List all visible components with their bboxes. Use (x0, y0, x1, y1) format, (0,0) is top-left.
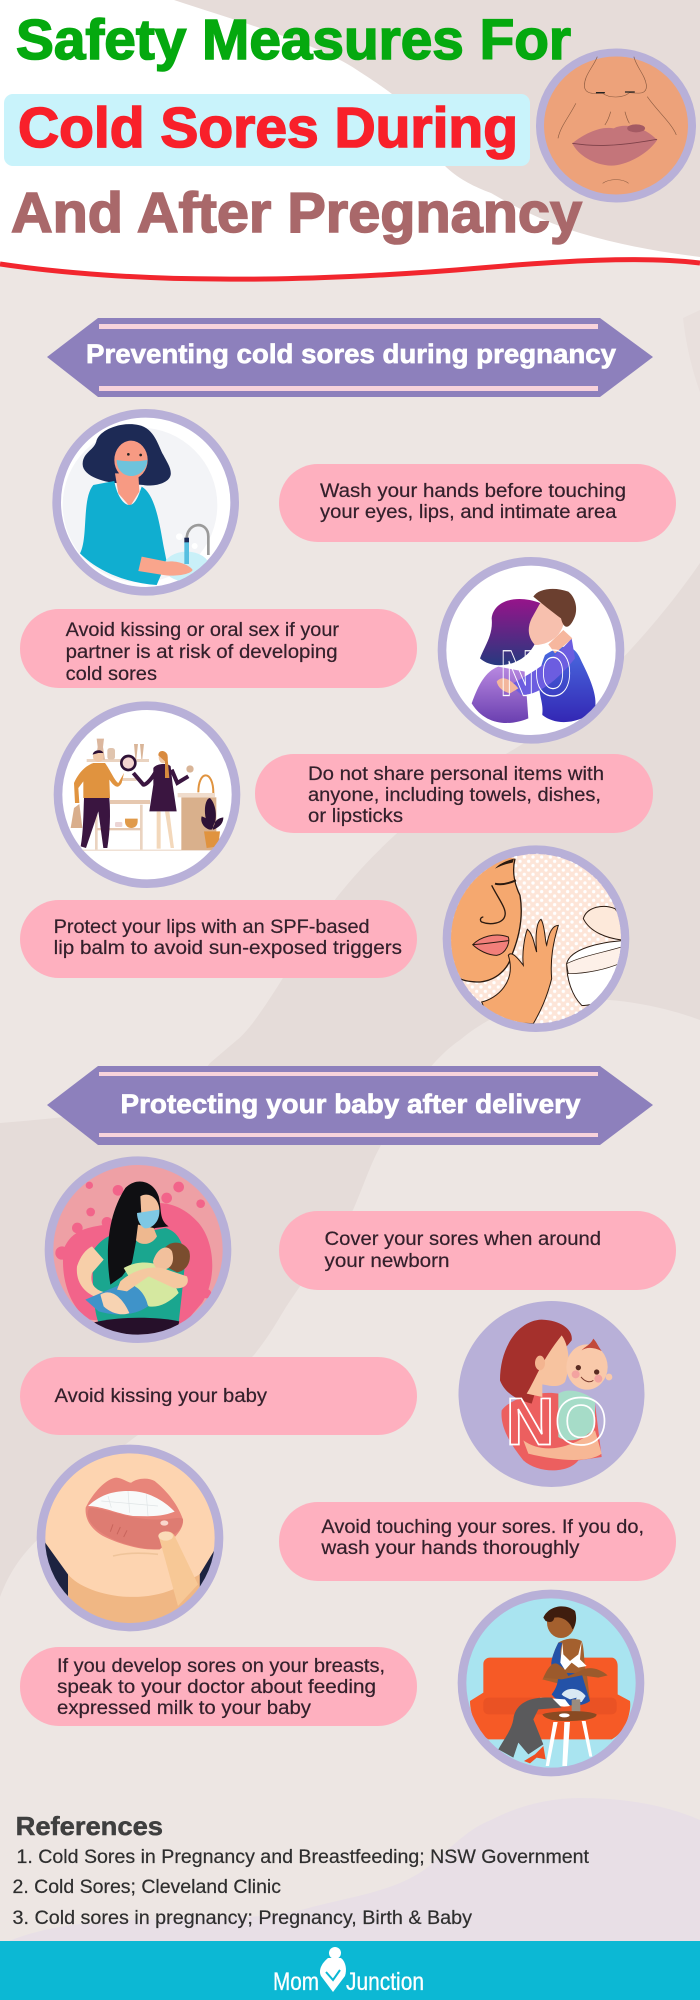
tip: cover sores: Cover your sores when around (324, 1229, 601, 1250)
tip: wash hands: Wash your hands before touching (320, 481, 626, 502)
references heading: References (16, 1811, 163, 1841)
banner: protecting your baby (47, 1066, 653, 1145)
tip: do not share items: Do not share personal items with (308, 764, 604, 785)
header panel (0, 0, 700, 279)
header white background (0, 0, 700, 279)
title line 1: Safety Measures For (16, 8, 571, 72)
banner heading: Preventing cold sores during pregnancy (86, 339, 616, 369)
header corner blob (174, 0, 700, 257)
tip: do not share items (255, 754, 653, 833)
tip: sores on breasts: If you develop sores on your breasts, (57, 1656, 385, 1677)
tip: protect lips (20, 900, 417, 978)
tip: do not share items: anyone, including towels, dishes, (308, 785, 601, 806)
NO label: NO (500, 637, 572, 710)
background corner shape (683, 310, 700, 392)
icon: woman washing hands (57, 413, 235, 591)
icon: masked mother nursing baby (49, 1161, 227, 1339)
logo text Junction: Junction (346, 1968, 424, 1996)
banner heading: Protecting your baby after delivery (120, 1089, 580, 1119)
tip: sores on breasts: expressed milk to your baby (57, 1698, 312, 1719)
NO label: NO (506, 1385, 607, 1459)
wavy red divider (0, 260, 700, 279)
tip: avoid kissing baby: Avoid kissing your baby (54, 1386, 268, 1407)
title highlight box (4, 94, 530, 166)
tip: sores on breasts (20, 1647, 417, 1726)
icon: logo figure (320, 1947, 346, 1992)
icon: couple kissing with NO (442, 561, 620, 739)
background band (0, 563, 700, 1597)
tip: avoid kissing baby (20, 1357, 417, 1435)
tip: avoid kissing or oral sex: partner is at risk of developing (66, 642, 338, 663)
icon: woman pumping breast milk on sofa (462, 1594, 640, 1772)
tip: wash hands: your eyes, lips, and intimate area (320, 502, 617, 523)
references (12, 1811, 590, 1929)
title line 2: Cold Sores During (18, 96, 518, 160)
icon: finger touching lip sore (40, 1449, 220, 1628)
reference 2: 2. Cold Sores; Cleveland Clinic (12, 1877, 281, 1898)
footer bar (0, 1941, 700, 2000)
tip: avoid touching sores: wash your hands thoroughly (320, 1538, 580, 1559)
reference 3: 3. Cold sores in pregnancy; Pregnancy, Birth & Baby (12, 1908, 473, 1929)
tip: avoid kissing or oral sex: Avoid kissing or oral sex if your (66, 620, 340, 641)
tip: avoid kissing or oral sex (20, 609, 417, 688)
reference 1: 1. Cold Sores in Pregnancy and Breastfeeding; NSW Government (16, 1847, 590, 1868)
banner: preventing cold sores (47, 318, 653, 397)
icon: couple sharing dishes in kitchen (58, 706, 236, 884)
tip: avoid kissing or oral sex: cold sores (66, 664, 157, 685)
tip: protect lips: lip balm to avoid sun-exposed triggers (54, 938, 402, 959)
tip: avoid touching sores (279, 1502, 676, 1581)
tip: wash hands (279, 464, 676, 542)
tip: cover sores: your newborn (324, 1251, 450, 1272)
tip: protect lips: Protect your lips with an SPF-based (54, 917, 370, 938)
icon: mother kissing baby with NO (458, 1301, 644, 1487)
icon: face with cold sore (540, 52, 692, 198)
tip: do not share items: or lipsticks (308, 806, 403, 827)
tip: cover sores (279, 1211, 676, 1290)
title line 3: And After Pregnancy (11, 181, 582, 245)
icon: woman applying lip balm (440, 842, 627, 1029)
logo text Mom: Mom (273, 1968, 319, 1996)
background lower blob (9, 1798, 700, 1941)
tip: avoid touching sores: Avoid touching your sores. If you do, (321, 1517, 644, 1538)
tip: sores on breasts: speak to your doctor about feeding (57, 1677, 376, 1698)
